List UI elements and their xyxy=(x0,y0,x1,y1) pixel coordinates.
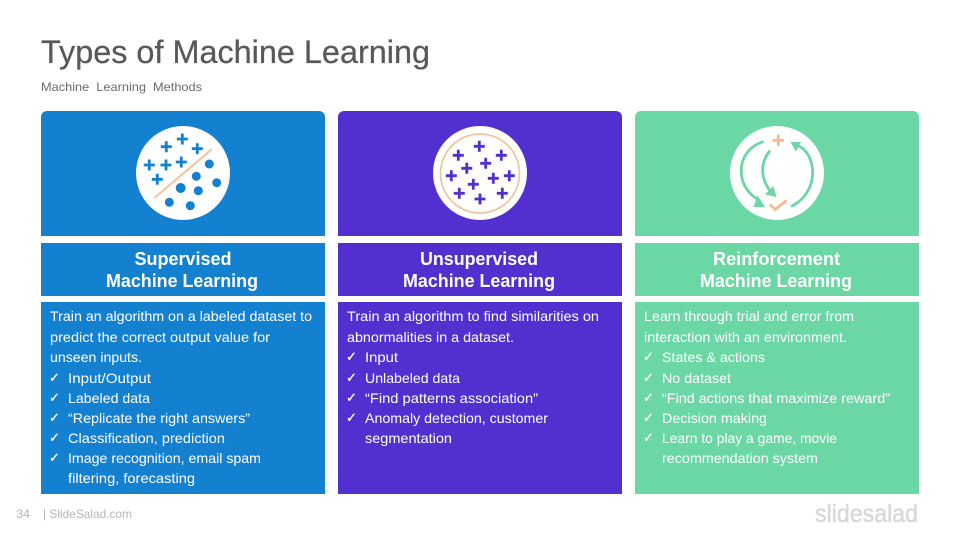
heading: reinforcement: Machine Learning xyxy=(700,271,852,291)
text block: supervised: unseen inputs. xyxy=(50,349,142,365)
text block: supervised: ✓ xyxy=(49,411,60,426)
text block: reinforcement: interaction with an environment. xyxy=(644,329,847,345)
text block: unsupervised: “Find patterns association” xyxy=(365,390,538,406)
heading: unsupervised xyxy=(338,243,622,296)
text block: reinforcement: Learn to play a game, movie xyxy=(662,430,837,446)
heading: supervised: Machine Learning xyxy=(106,271,258,291)
panel: unsupervised xyxy=(338,111,622,494)
heading: unsupervised: Machine Learning xyxy=(403,271,555,291)
text block: reinforcement: ✓ xyxy=(643,431,654,446)
panel: supervised xyxy=(41,111,325,494)
text block: supervised: Image recognition, email spam xyxy=(68,450,261,466)
text block: reinforcement xyxy=(635,302,919,494)
icon: clustered plus signs xyxy=(433,126,527,220)
subtitle: Machine Learning Methods xyxy=(41,80,202,94)
heading: reinforcement xyxy=(635,243,919,296)
icon panel: unsupervised xyxy=(338,111,622,236)
text block: reinforcement: ✓ xyxy=(643,411,654,426)
text block: reinforcement: ✓ xyxy=(643,371,654,386)
text block: reinforcement: Decision making xyxy=(662,410,767,426)
heading: reinforcement: Reinforcement xyxy=(713,249,840,269)
icon: plus and dot classification xyxy=(136,126,230,220)
text block: unsupervised: Input xyxy=(365,349,398,365)
text block: reinforcement: States & actions xyxy=(662,349,765,365)
text block: supervised: predict the correct output value for xyxy=(50,329,270,345)
text block: unsupervised: Train an algorithm to find similarities on xyxy=(347,308,599,324)
text block: supervised: Labeled data xyxy=(68,390,150,406)
text block: reinforcement: No dataset xyxy=(662,370,731,386)
text block: unsupervised: ✓ xyxy=(346,371,357,386)
heading: supervised xyxy=(41,243,325,296)
text block: supervised: ✓ xyxy=(49,371,60,386)
footer site name: | SlideSalad.com xyxy=(43,507,132,521)
text block: reinforcement: ✓ xyxy=(643,391,654,406)
text block: unsupervised: Unlabeled data xyxy=(365,370,460,386)
text block: unsupervised: ✓ xyxy=(346,411,357,426)
text block: unsupervised: segmentation xyxy=(365,430,452,446)
panel: reinforcement xyxy=(635,111,919,494)
text block: unsupervised: ✓ xyxy=(346,391,357,406)
heading: supervised: Supervised xyxy=(134,249,232,269)
heading: unsupervised: Unsupervised xyxy=(420,249,538,269)
text block: reinforcement: “Find actions that maximize reward” xyxy=(662,390,890,406)
text block: unsupervised: abnormalities in a dataset. xyxy=(347,329,514,345)
text block: unsupervised: Anomaly detection, customer xyxy=(365,410,548,426)
text block: supervised: Classification, prediction xyxy=(68,430,225,446)
text block: supervised: filtering, forecasting xyxy=(68,470,195,486)
text block: reinforcement: recommendation system xyxy=(662,450,818,466)
text block: unsupervised: ✓ xyxy=(346,350,357,365)
icon: reward feedback cycle xyxy=(730,126,824,220)
text block: unsupervised xyxy=(338,302,622,494)
icon panel: supervised xyxy=(41,111,325,236)
text block: supervised xyxy=(41,302,325,494)
title: Types of Machine Learning xyxy=(41,34,430,70)
text block: supervised: ✓ xyxy=(49,391,60,406)
text block: supervised: “Replicate the right answers” xyxy=(68,410,250,426)
icon panel: reinforcement xyxy=(635,111,919,236)
text block: supervised: Input/Output xyxy=(68,370,151,386)
page number: 34 xyxy=(16,507,30,521)
text block: reinforcement: Learn through trial and error from xyxy=(644,308,854,324)
logo wordmark: slidesalad xyxy=(815,500,918,528)
text block: supervised: Train an algorithm on a labeled dataset to xyxy=(50,308,312,324)
text block: supervised: ✓ xyxy=(49,431,60,446)
text block: reinforcement: ✓ xyxy=(643,350,654,365)
text block: supervised: ✓ xyxy=(49,451,60,466)
